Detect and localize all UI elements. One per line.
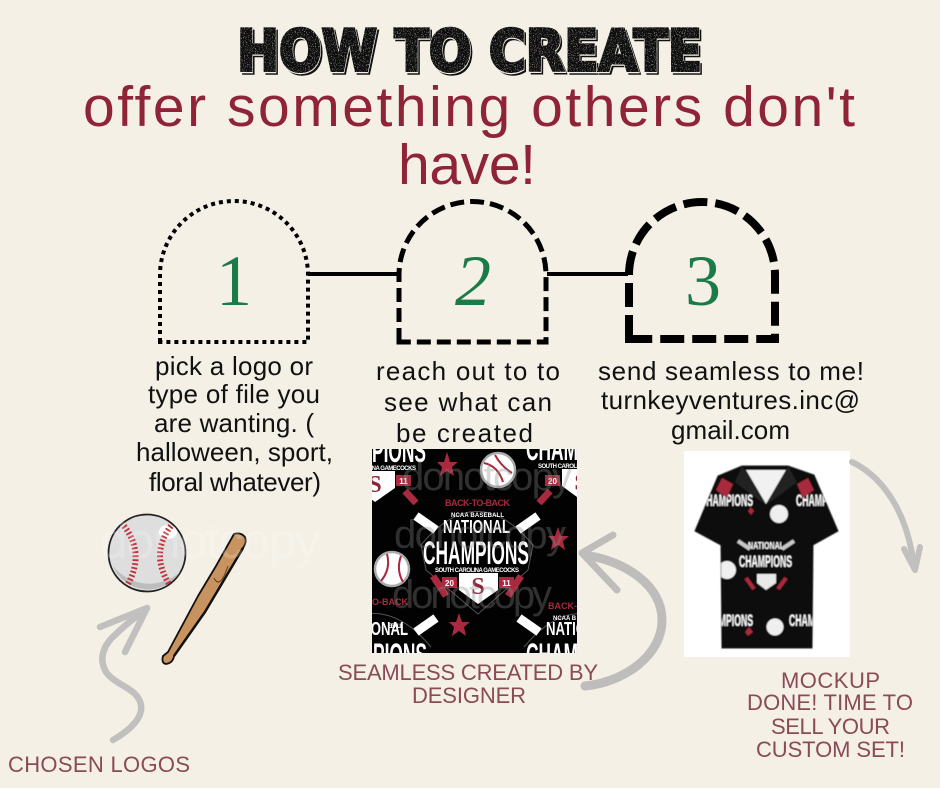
step 2 text: see what can bbox=[384, 387, 552, 417]
step 1 text: floral whatever) bbox=[149, 467, 321, 497]
number 3: 3 bbox=[685, 241, 721, 321]
icon: baseball upper bbox=[481, 453, 515, 487]
motif: top right crest copy bbox=[526, 449, 577, 506]
motif: top left crest copy: SOUTH CAROLINA GAMECOCKS bbox=[332, 466, 416, 472]
motif: top left crest copy: S bbox=[368, 472, 382, 498]
caption: mockup done: CUSTOM SET! bbox=[756, 737, 905, 762]
motif: center crest: S bbox=[471, 574, 485, 600]
motif: bottom left crest copy: CHAMPIONS bbox=[321, 637, 427, 673]
connector lines bbox=[308, 272, 628, 276]
step 1 text: pick a logo or bbox=[155, 351, 313, 381]
watermarks: donotcopy bbox=[402, 455, 572, 499]
motif: top right crest copy: CHAMPIONS bbox=[526, 431, 632, 467]
watermarks bbox=[392, 455, 572, 617]
step 3 text bbox=[598, 356, 864, 445]
step 3 arch bbox=[629, 202, 775, 339]
shirt mockup image: CHAMPIONS bbox=[789, 611, 842, 630]
caption: mockup done: MOCKUP bbox=[781, 668, 880, 693]
step 1 text: are wanting. ( bbox=[154, 408, 314, 438]
step 3 text: gmail.com bbox=[671, 415, 790, 445]
heading: offer something others don't have: offer something others don't bbox=[83, 75, 855, 139]
motif: top right crest copy: S bbox=[574, 470, 588, 496]
motif: top right crest copy: SOUTH CAROLINA GAMECOCKS bbox=[538, 464, 622, 470]
motif: top right crest copy: 20 bbox=[548, 477, 557, 486]
motif: bottom right crest copy bbox=[516, 602, 577, 653]
step 3 text: send seamless to me! bbox=[598, 356, 864, 386]
arrow: seamless to designer bbox=[582, 535, 662, 686]
step 2 text: be created bbox=[396, 418, 533, 448]
icon: baseball lower bbox=[375, 552, 409, 586]
motif: top left crest copy: 11 bbox=[399, 477, 408, 486]
motif: bottom right crest copy: NATIONAL bbox=[546, 619, 613, 639]
motif: center crest: 11 bbox=[502, 579, 511, 588]
seamless pattern image bbox=[372, 449, 577, 653]
caption: seamless created by designer: SEAMLESS CREATED BY bbox=[338, 660, 598, 685]
step 2 arch bbox=[399, 202, 546, 342]
motif: center crest bbox=[416, 498, 538, 614]
motif: center crest: 20 bbox=[445, 579, 454, 588]
caption: seamless created by designer: DESIGNER bbox=[412, 683, 526, 708]
watermarks: donotcopy bbox=[392, 573, 552, 617]
arrow: to chosen logos bbox=[100, 608, 147, 740]
motif: bottom right crest copy: NCAA B bbox=[553, 616, 577, 622]
shirt mockup image: CHAMPIONS bbox=[700, 491, 753, 510]
motif: center crest: SOUTH CAROLINA GAMECOCKS bbox=[435, 568, 519, 574]
heading: offer something others don't have bbox=[83, 75, 855, 197]
step 1 arch bbox=[160, 201, 308, 342]
shirt mockup image: NATIONAL bbox=[748, 541, 784, 552]
watermarks: donotcopy bbox=[394, 513, 566, 557]
title: how to create: HOW TO CREATE bbox=[237, 18, 702, 84]
title: how to create: HOW TO CREATE bbox=[237, 18, 702, 84]
collar bbox=[746, 470, 786, 504]
caption: mockup done bbox=[747, 668, 913, 762]
caption: chosen logos: CHOSEN LOGOS bbox=[8, 752, 190, 777]
icon: baseball bbox=[108, 514, 186, 592]
motif: bottom left crest copy: O-BACK bbox=[372, 597, 408, 607]
title: how to create: HOW TO CREATE bbox=[237, 19, 702, 85]
shirt mockup image bbox=[684, 451, 850, 657]
number 1: 1 bbox=[216, 241, 252, 321]
shirt mockup image: CHAMPIONS bbox=[700, 611, 753, 630]
motif: bottom right crest copy: CHAMPIONS bbox=[526, 637, 632, 673]
step 1 text: type of file you bbox=[148, 379, 320, 409]
caption: mockup done: SELL YOUR bbox=[771, 714, 890, 739]
step 2 text: reach out to to bbox=[376, 356, 560, 386]
motif: bottom left crest copy: EBALL bbox=[388, 624, 403, 630]
motif: top left crest copy: CHAMPIONS bbox=[320, 433, 426, 469]
motif: bottom left crest copy bbox=[372, 598, 438, 653]
step 2 text bbox=[376, 356, 560, 448]
motif: center crest: NCAA BASEBALL bbox=[451, 513, 504, 519]
title: how to create: HOW TO CREATE bbox=[239, 21, 704, 87]
watermark over baseball: donotcopy bbox=[100, 513, 320, 569]
heading: offer something others don't have: have! bbox=[398, 133, 536, 197]
shirt mockup image: CHAMPIONS bbox=[739, 552, 792, 571]
arrow: shirt to mockup caption bbox=[852, 462, 920, 570]
motif: bottom left crest copy: NATIONAL bbox=[341, 619, 408, 639]
step 1 text: halloween, sport, bbox=[136, 437, 333, 467]
shirt mockup image: CHAMPIONS bbox=[796, 491, 849, 510]
caption: mockup done: DONE! TIME TO bbox=[747, 690, 913, 715]
motif: center crest: CHAMPIONS bbox=[423, 535, 529, 571]
stars bbox=[437, 452, 569, 636]
step 1 text bbox=[136, 351, 333, 497]
caption: seamless created by designer bbox=[338, 660, 598, 708]
step 3 text: turnkeyventures.inc@ bbox=[601, 385, 860, 415]
motif: top left crest copy bbox=[372, 449, 426, 506]
icon: bat bbox=[162, 533, 246, 664]
motif: center crest: BACK-TO-BACK bbox=[445, 498, 510, 508]
motif: center crest: NATIONAL bbox=[443, 517, 510, 537]
number 2: 2 bbox=[455, 241, 491, 321]
motif: bottom right crest copy: BACK-T bbox=[548, 601, 583, 611]
